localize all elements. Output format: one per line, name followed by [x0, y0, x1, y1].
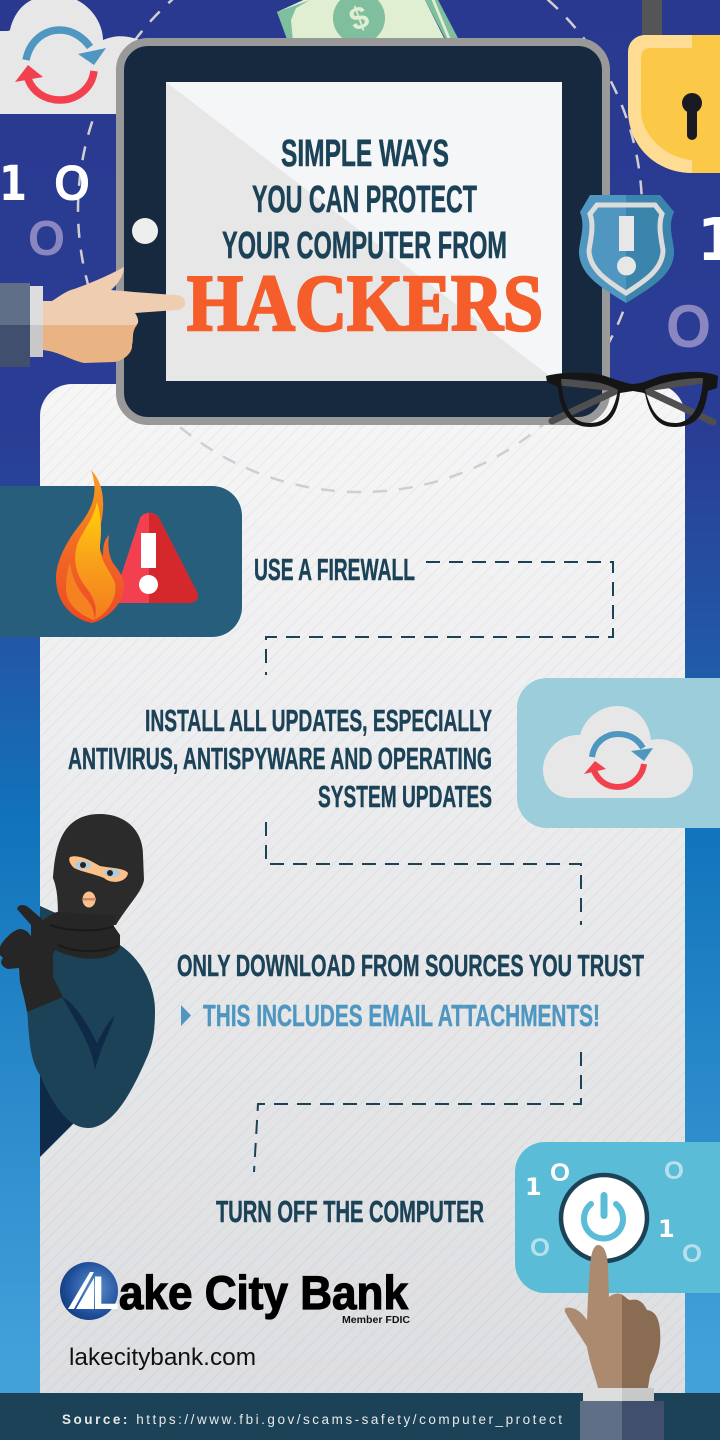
footer source bar: Source: https://www.fbi.gov/scams-safety/computer_protect — [62, 1412, 562, 1427]
panel: updates cloud — [517, 678, 720, 828]
binary digits: O — [54, 155, 90, 211]
binary digits — [0, 155, 720, 360]
binary digits: O — [666, 293, 711, 360]
step 4 text: TURN OFF THE COMPUTER — [216, 1194, 484, 1229]
binary digits: O — [550, 1159, 570, 1187]
icon: police shield — [579, 195, 674, 303]
footer source bar — [0, 1393, 720, 1440]
binary digits: 1 — [525, 1173, 542, 1201]
panel: power button — [515, 1142, 720, 1293]
binary digits: O — [682, 1240, 702, 1268]
binary digits: 1 — [0, 156, 27, 212]
icon: cash — [277, 0, 460, 44]
binary digits: O — [664, 1157, 684, 1185]
panel: firewall — [0, 470, 242, 637]
binary digits: O — [28, 212, 65, 266]
website url: lakecitybank.com — [69, 1344, 256, 1371]
binary digits — [525, 1157, 702, 1268]
arrow: dashed connector 1 — [266, 562, 613, 675]
binary digits: O — [530, 1234, 550, 1262]
icon: cloud — [543, 706, 693, 798]
title: HACKERS — [187, 260, 543, 348]
binary digits: 1 — [658, 1215, 675, 1243]
title: SIMPLE WAYS — [281, 133, 449, 175]
tablet screen — [166, 82, 562, 381]
icon: hacker in balaclava — [0, 814, 155, 1157]
icon: hand pressing button with sleeve — [565, 1245, 664, 1440]
icon: sync arrows — [584, 734, 653, 787]
dashed orbit circle — [78, 0, 642, 492]
tablet button — [132, 218, 158, 244]
icon: warning triangle — [112, 513, 198, 603]
step 2 text: SYSTEM UPDATES — [318, 779, 492, 814]
arrow: dashed connector 2 — [266, 822, 581, 925]
step 2 text — [68, 703, 492, 814]
icon: glasses — [546, 372, 718, 427]
arrow: dashed connector 3 — [254, 1052, 581, 1172]
logo: Lake City Bank: Lake City Bank — [92, 1266, 409, 1319]
logo: Lake City Bank: Member FDIC — [342, 1315, 410, 1326]
title: YOUR COMPUTER FROM — [222, 225, 507, 267]
icon: padlock — [628, 0, 720, 173]
tablet — [120, 42, 606, 421]
title — [187, 133, 543, 348]
power button — [561, 1175, 647, 1261]
title: YOU CAN PROTECT — [252, 179, 477, 221]
icon: flame — [56, 470, 124, 623]
step 2 text: INSTALL ALL UPDATES, ESPECIALLY — [145, 703, 492, 738]
panel: main content card — [40, 384, 685, 1424]
icon: cloud with sync arrows — [0, 0, 140, 114]
step 1 text: USE A FIREWALL — [254, 552, 415, 587]
icon: pointing hand with sleeve — [0, 267, 185, 367]
